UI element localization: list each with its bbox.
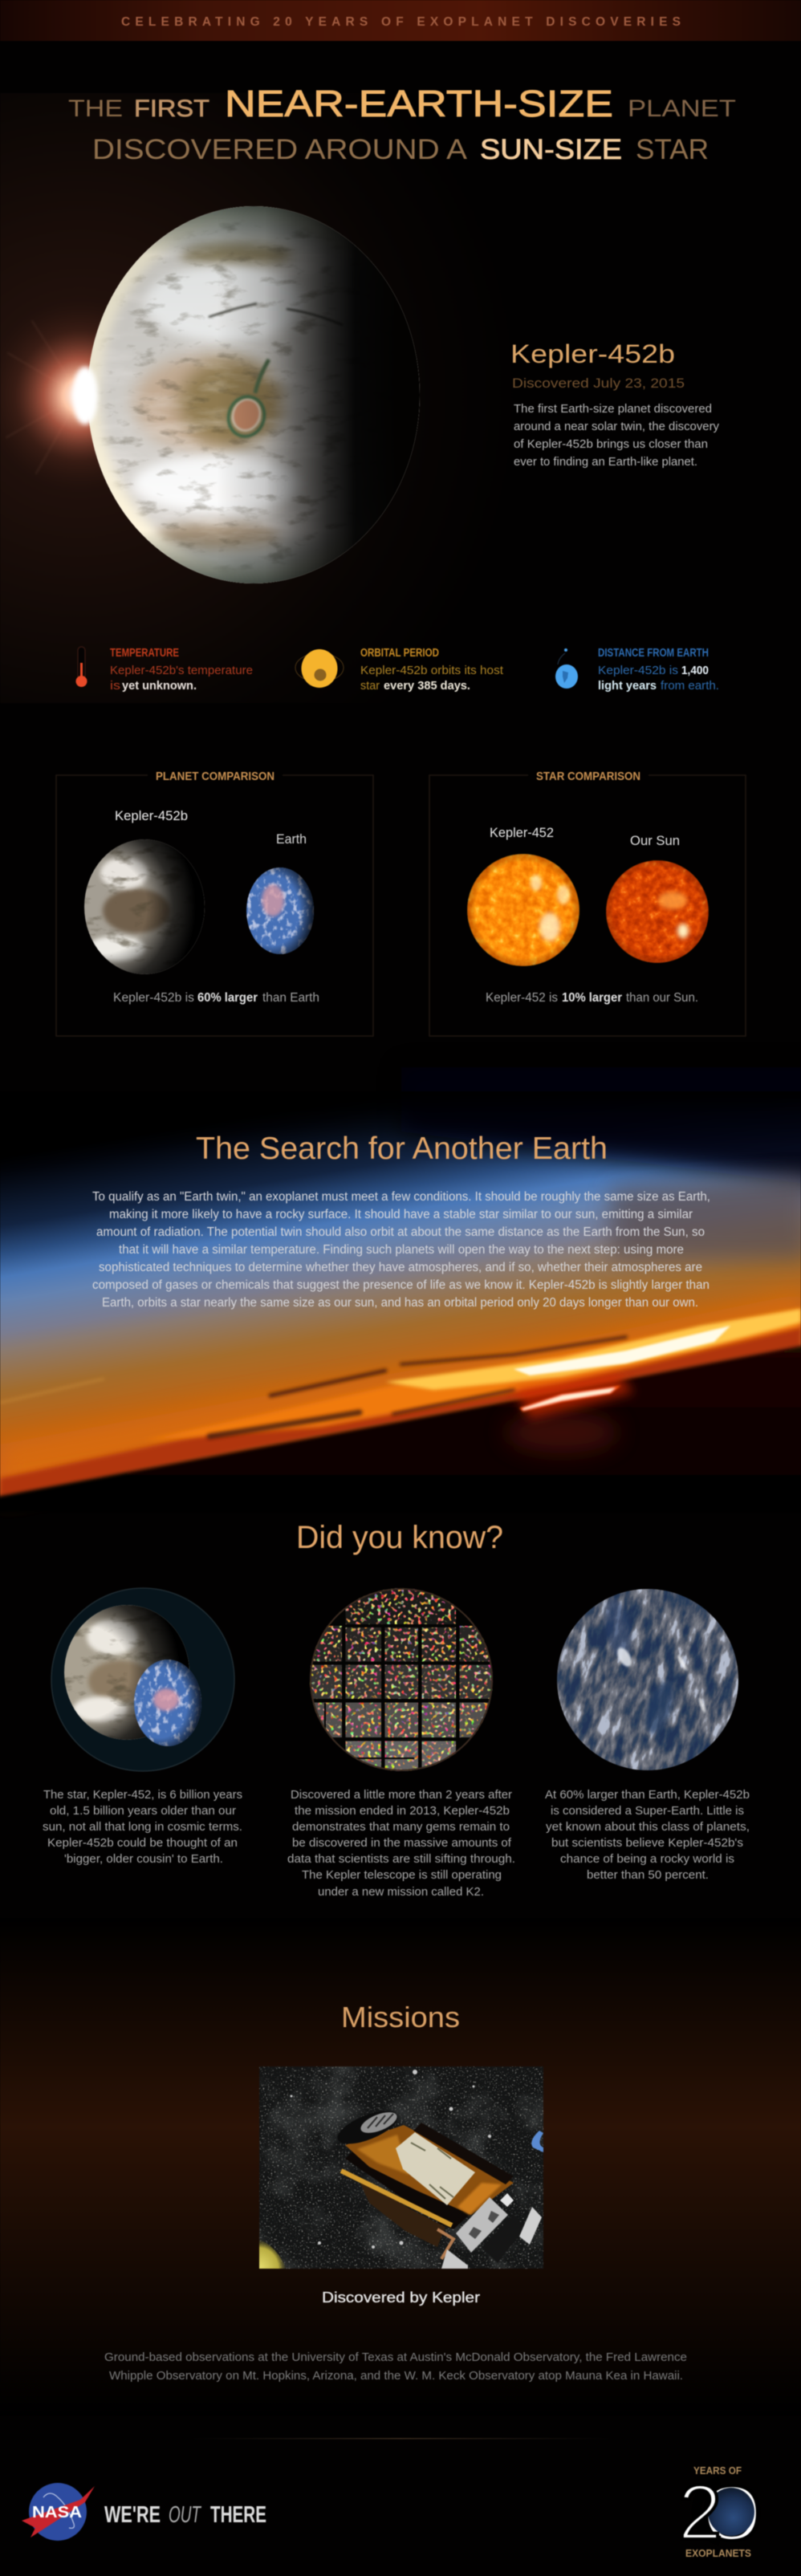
stat: distance from Earth: from earth. xyxy=(661,679,719,693)
20 years of exoplanets logo: YEARS OF xyxy=(693,2464,742,2476)
stat: temperature: Kepler-452b's temperature xyxy=(110,664,253,677)
hero description: ever to finding an Earth-like planet. xyxy=(514,455,697,469)
text block: search description: composed of gases or chemicals that suggest the presence of life as we know it. Kepler-452b is slightly larger than xyxy=(92,1278,710,1292)
fact 3 text xyxy=(545,1788,750,1882)
caption: star size: than our Sun. xyxy=(626,991,698,1005)
title: NEAR-EARTH-SIZE xyxy=(225,83,613,124)
hero description: Discovered July 23, 2015 xyxy=(512,376,685,391)
heading: Did you know?: Did you know? xyxy=(296,1520,503,1555)
caption: planet size: 60% larger xyxy=(197,991,258,1005)
20 years of exoplanets logo: EXOPLANETS xyxy=(685,2547,751,2559)
stat: distance from Earth: DISTANCE FROM EARTH xyxy=(598,647,709,660)
telescope body xyxy=(333,2104,542,2269)
hero description xyxy=(510,339,719,469)
caption: star size: Kepler-452 is xyxy=(486,991,558,1005)
fact 1 text: sun, not all that long in cosmic terms. xyxy=(43,1820,242,1834)
fact 2: Kepler field-of-view mosaic circle xyxy=(310,1588,493,1772)
title: PLANET xyxy=(628,95,736,122)
panel: star comparison xyxy=(429,770,746,1036)
caption: planet size xyxy=(113,991,319,1005)
text block: search description: sophisticated techniques to determine whether they have atmospheres, and if so, whether their atmospheres are xyxy=(99,1261,702,1274)
fact 1: planet comparison circle xyxy=(51,1588,234,1771)
NASA logo xyxy=(22,2483,95,2541)
tagline xyxy=(104,2502,266,2528)
title: SUN-SIZE xyxy=(480,134,622,165)
20 years of exoplanets logo: 0 xyxy=(701,2469,762,2557)
fact 2 text: data that scientists are still sifting through. xyxy=(287,1852,515,1866)
caption: planet size: Kepler-452b is xyxy=(113,991,194,1005)
text block: search description: Earth, orbits a star nearly the same size as our sun, and has an orbital period only 20 days longer than our own. xyxy=(102,1296,698,1310)
heading: Missions: Missions xyxy=(341,2001,460,2034)
footnote: ground-based observations: Ground-based observations at the University of Texas at Austin's McDonald Observatory, the Fred Lawrence xyxy=(104,2351,687,2364)
title: FIRST xyxy=(134,95,209,122)
heading: The Search for Another Earth: The Search for Another Earth xyxy=(196,1132,608,1166)
fact 2 text: Discovered a little more than 2 years after xyxy=(291,1788,512,1802)
stat: orbital period: ORBITAL PERIOD xyxy=(360,647,439,660)
stat: orbital period: star xyxy=(360,679,380,693)
footnote: ground-based observations: Whipple Observatory on Mt. Hopkins, Arizona, and the W. M. Keck Observatory atop Mauna Kea in Hawaii. xyxy=(109,2370,683,2383)
stat: temperature: TEMPERATURE xyxy=(110,647,179,660)
hero description: around a near solar twin, the discovery xyxy=(514,420,719,433)
star: Kepler-452 xyxy=(466,852,581,968)
hero description: Kepler-452b xyxy=(510,339,675,368)
label: Kepler-452: Kepler-452 xyxy=(490,826,554,840)
text block: search description: that it will have a similar temperature. Finding such planets will open the way to the next step: using more xyxy=(119,1243,684,1257)
stat: orbital period: Kepler-452b orbits its host xyxy=(360,664,504,677)
fact 2 text: the mission ended in 2013, Kepler-452b xyxy=(295,1804,510,1818)
label: Our Sun: Our Sun xyxy=(630,834,680,848)
fact 3 text: yet known about this class of planets, xyxy=(546,1820,750,1834)
fact 1 text: 'bigger, older cousin' to Earth. xyxy=(64,1852,223,1866)
heading: planet comparison: PLANET COMPARISON xyxy=(156,770,274,783)
fact 2 text: under a new mission called K2. xyxy=(318,1885,484,1899)
top banner: CELEBRATING 20 YEARS OF EXOPLANET DISCOVERIES xyxy=(121,15,681,29)
stat: temperature: yet unknown. xyxy=(122,679,197,693)
fact 1 text xyxy=(43,1788,242,1866)
fact 3 text: At 60% larger than Earth, Kepler-452b xyxy=(545,1788,750,1802)
heading: star comparison: STAR COMPARISON xyxy=(536,770,640,783)
fact 3 text: chance of being a rocky world is xyxy=(560,1852,734,1866)
title: DISCOVERED AROUND A xyxy=(92,134,468,165)
caption: star size xyxy=(486,991,698,1005)
stat: distance from Earth xyxy=(555,647,719,693)
stat: distance from Earth: Kepler-452b is xyxy=(598,664,678,677)
title: THE xyxy=(68,95,123,122)
fact 3: rocky surface circle xyxy=(557,1588,739,1771)
stat: temperature: is xyxy=(110,679,120,693)
stat: orbital period: every 385 days. xyxy=(384,679,470,693)
fact 2 text: The Kepler telescope is still operating xyxy=(302,1868,502,1882)
footnote: ground-based observations xyxy=(104,2351,687,2383)
icon: star with orbiting planet xyxy=(295,649,344,688)
panel: orbital sunrise background xyxy=(0,1067,801,1513)
caption: planet size: than Earth xyxy=(262,991,319,1005)
fact 1 text: The star, Kepler-452, is 6 billion years xyxy=(43,1788,242,1802)
fact 2 text: demonstrates that many gems remain to xyxy=(292,1820,510,1834)
label: Earth: Earth xyxy=(276,832,307,847)
NASA logo: NASA xyxy=(32,2504,82,2521)
panel: planet comparison xyxy=(56,770,373,1036)
top banner xyxy=(0,0,801,41)
fact 3 text: better than 50 percent. xyxy=(587,1868,709,1882)
text block: search description: making it more likely to have a rocky surface. It should have a stable star similar to our sun, emitting a similar xyxy=(109,1208,693,1221)
caption: star size: 10% larger xyxy=(562,991,622,1005)
planet: Kepler-452b xyxy=(80,839,209,974)
hero planet Kepler-452b with stellar flare xyxy=(0,206,421,583)
text block: search description: To qualify as an "Earth twin," an exoplanet must meet a few conditions. It should be roughly the same size as Earth, xyxy=(92,1190,710,1204)
fact 3 text: is considered a Super-Earth. Little is xyxy=(551,1804,744,1818)
tagline: THERE xyxy=(210,2502,266,2528)
stat: orbital period xyxy=(295,647,504,693)
icon: thermometer xyxy=(75,647,87,687)
planet: Earth xyxy=(245,867,315,954)
image: Kepler telescope illustration xyxy=(259,2066,543,2269)
icon: Earth and distant dot xyxy=(555,648,578,689)
text block: search description: amount of radiation. The potential twin should also orbit at about the same distance as the Earth from the Sun, so xyxy=(96,1225,705,1239)
hero description: of Kepler-452b brings us closer than xyxy=(514,437,708,451)
fact 1 text: old, 1.5 billion years older than our xyxy=(50,1804,236,1818)
fact 3 text: but scientists believe Kepler-452b's xyxy=(551,1836,743,1850)
caption: Discovered by Kepler: Discovered by Kepler xyxy=(322,2290,480,2306)
20 years of exoplanets logo: 2 xyxy=(678,2468,722,2556)
fact 1 text: Kepler-452b could be thought of an xyxy=(47,1836,238,1850)
tagline: OUT xyxy=(169,2502,201,2528)
title: STAR xyxy=(636,134,709,165)
fact 2 text: be discovered in the massive amounts of xyxy=(292,1836,512,1850)
20 years of exoplanets logo xyxy=(678,2464,762,2559)
hero description: The first Earth-size planet discovered xyxy=(514,402,712,416)
fact 2 text xyxy=(287,1788,515,1899)
label: Kepler-452b: Kepler-452b xyxy=(115,809,188,823)
stat: temperature xyxy=(75,647,253,693)
title xyxy=(68,83,736,165)
text block: search description xyxy=(92,1190,710,1310)
tagline: WE'RE xyxy=(104,2502,161,2528)
star: our Sun xyxy=(604,859,710,965)
stat: distance from Earth: 1,400 xyxy=(681,664,709,677)
stat: distance from Earth: light years xyxy=(598,679,657,693)
